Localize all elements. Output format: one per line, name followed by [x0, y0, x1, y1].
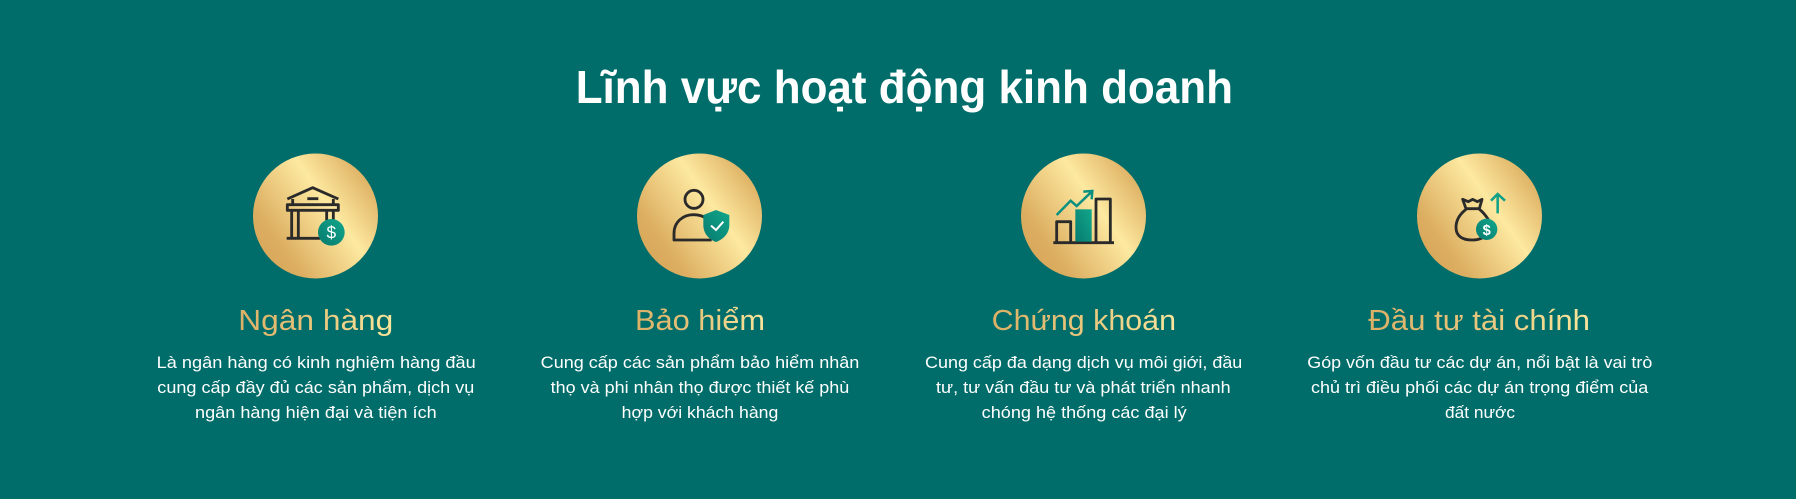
description: Chứng khoán: Cung cấp đa dạng dịch vụ môi giới, đầu	[925, 353, 1242, 372]
description: Bảo hiểm	[541, 353, 859, 422]
description: Ngân hàng: cung cấp đầy đủ các sản phẩm, dịch vụ	[157, 378, 474, 397]
icon: money bag with up arrow: $	[1483, 223, 1491, 239]
description: Đầu tư tài chính: chủ trì điều phối các dự án trọng điểm của	[1311, 378, 1649, 397]
description: Bảo hiểm: Cung cấp các sản phẩm bảo hiểm nhân	[541, 353, 859, 372]
description: Chứng khoán	[925, 353, 1242, 422]
description: Bảo hiểm: thọ và phi nhân thọ được thiết kế phù	[551, 378, 849, 397]
description: Bảo hiểm: hợp với khách hàng	[622, 403, 778, 422]
description: Ngân hàng	[157, 353, 476, 422]
description: Đầu tư tài chính: đất nước	[1445, 403, 1516, 422]
description: Đầu tư tài chính	[1307, 353, 1652, 422]
icon: money bag with up arrow	[1417, 154, 1542, 278]
description: Ngân hàng: Là ngân hàng có kinh nghiệm hàng đầu	[157, 353, 476, 372]
icon: person with shield	[637, 154, 762, 278]
heading: Bảo hiểm: Bảo hiểm	[635, 305, 765, 337]
description: Chứng khoán: chóng hệ thống các đại lý	[982, 403, 1187, 422]
description: Đầu tư tài chính: Góp vốn đầu tư các dự án, nổi bật là vai trò	[1307, 353, 1652, 372]
panel: Bảo hiểm	[541, 154, 859, 422]
description: Ngân hàng: ngân hàng hiện đại và tiện ích	[195, 403, 437, 422]
description: Chứng khoán: tư, tư vấn đầu tư và phát triển nhanh	[936, 378, 1231, 397]
icon: bank with dollar coin: $	[327, 222, 337, 242]
icon: bank with dollar coin	[253, 154, 378, 278]
panel: Đầu tư tài chính	[1307, 154, 1652, 422]
panel: Chứng khoán	[925, 154, 1242, 422]
heading: Ngân hàng: Ngân hàng	[238, 305, 393, 337]
heading: Đầu tư tài chính: Đầu tư tài chính	[1368, 305, 1590, 337]
title: Lĩnh vực hoạt động kinh doanh	[576, 61, 1233, 113]
panel: Ngân hàng	[157, 154, 476, 422]
icon: rising bar chart	[1021, 154, 1146, 278]
heading: Chứng khoán: Chứng khoán	[992, 305, 1176, 337]
